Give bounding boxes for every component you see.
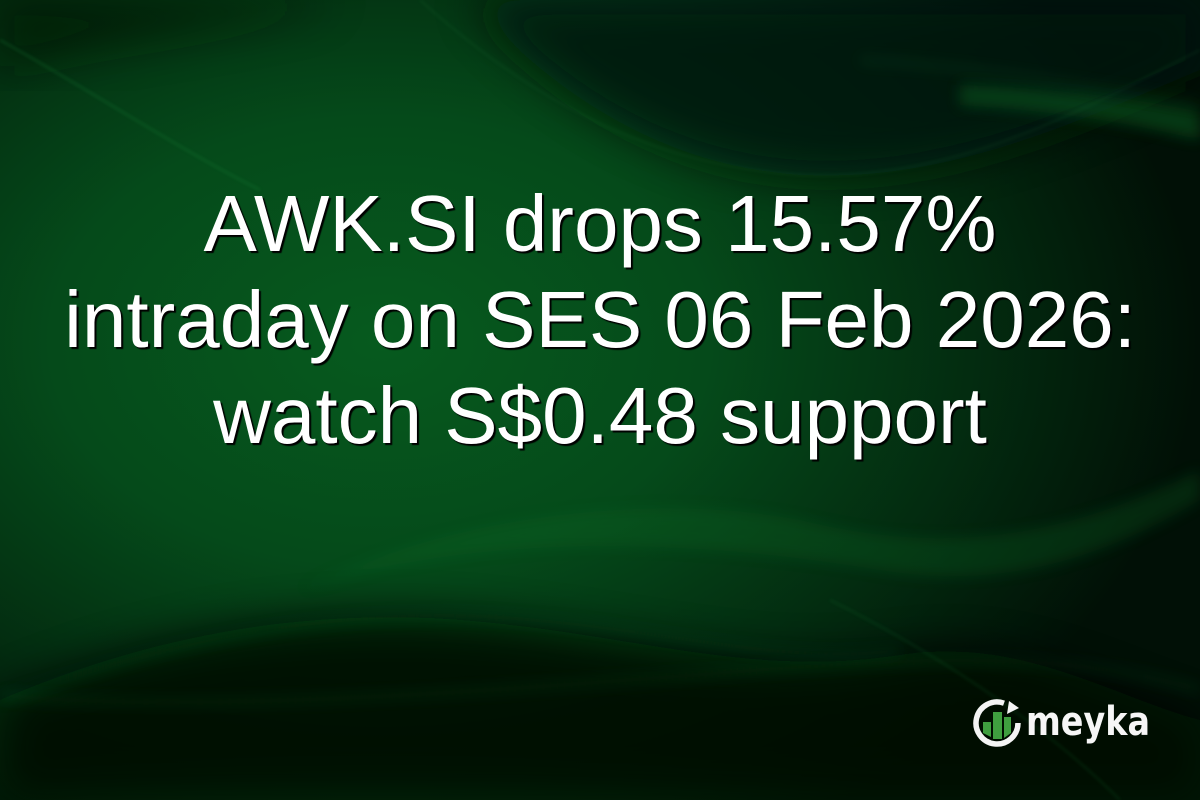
title: watch S$0.48 support (213, 371, 987, 460)
logo: meyka (973, 699, 1150, 747)
title: AWK.SI drops 15.57% (204, 179, 996, 268)
title: intraday on SES 06 Feb 2026: (64, 275, 1136, 364)
title (64, 179, 1136, 462)
icon: ring with bars and arrow (976, 701, 1019, 744)
